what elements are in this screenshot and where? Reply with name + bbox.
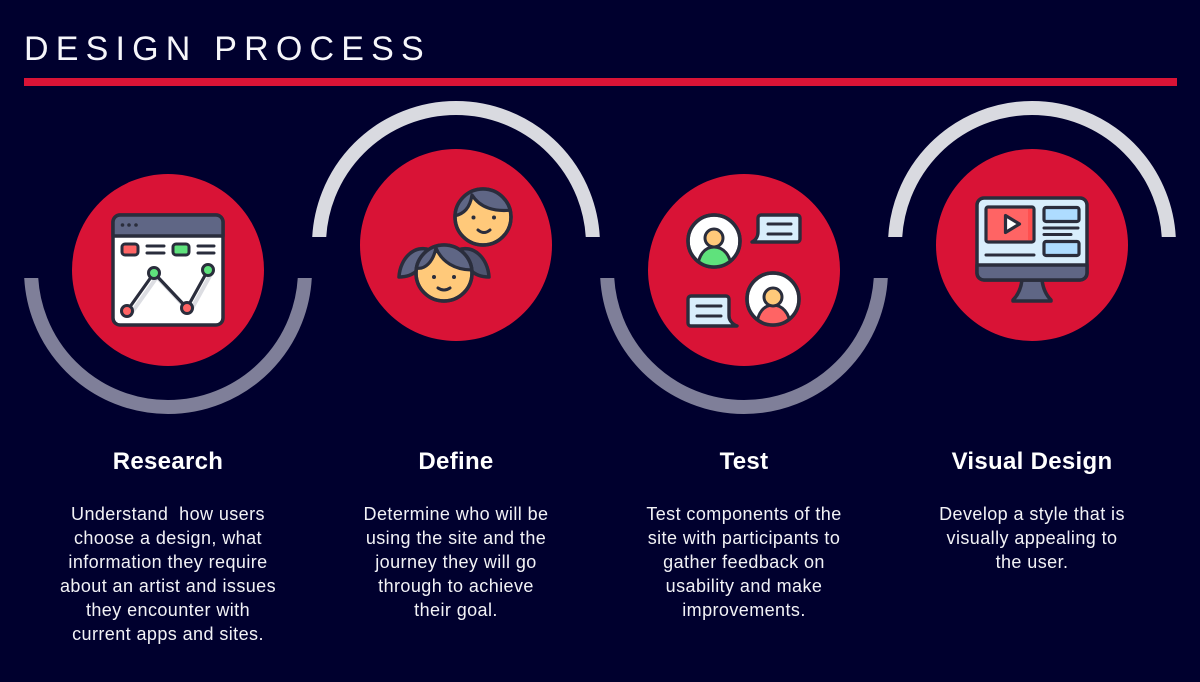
text: Test description: gather feedback on [663,552,825,572]
title: DESIGN PROCESS [24,30,431,68]
arc: upper light [312,101,600,237]
text: Define description: through to achieve [378,576,534,596]
text: Define description: using the site and the [366,528,546,548]
heading: Test: Test [720,448,768,475]
text: Research description: they encounter with [86,600,250,620]
text: Research description: about an artist and issues [60,576,276,596]
text: Visual Design description: Develop a style that is [939,504,1125,524]
text: Visual Design description: visually appealing to [947,528,1117,548]
arc: lower gray [600,278,888,414]
heading: Research: Research [113,448,223,475]
text: Research description: Understand how users [71,504,265,524]
red circle [648,174,840,366]
icon: monitor with video player [977,198,1087,301]
text: Research description [60,504,276,644]
text: Test description: Test components of the [646,504,842,524]
icon: browser window with line chart [113,215,223,325]
text: Research description: choose a design, what [74,528,262,548]
icon: two faces [399,182,512,301]
arc: upper light [888,101,1176,237]
text: Define description: journey they will go [375,552,537,572]
text: Define description: their goal. [414,600,498,620]
text: Visual Design description [939,504,1125,572]
red circle [72,174,264,366]
text: Research description: information they require [68,552,268,572]
text: Research description: current apps and sites. [72,624,264,644]
text: Test description: site with participants to [648,528,840,548]
heading: Define: Define [418,448,494,475]
text: Test description: usability and make [666,576,822,596]
panel: define [312,101,600,620]
text: Test description [646,504,842,620]
red circle [936,149,1128,341]
icon: two users with speech bubbles [688,215,800,326]
text: Visual Design description: the user. [996,552,1068,572]
panel: visual design [888,101,1176,572]
panel: research [24,174,312,644]
text: Define description [364,504,548,620]
heading: Visual Design: Visual Design [952,448,1112,475]
text: Test description: improvements. [682,600,806,620]
text: Define description: Determine who will be [364,504,548,524]
panel: test [600,174,888,620]
red circle [360,149,552,341]
arc: lower gray [24,278,312,414]
